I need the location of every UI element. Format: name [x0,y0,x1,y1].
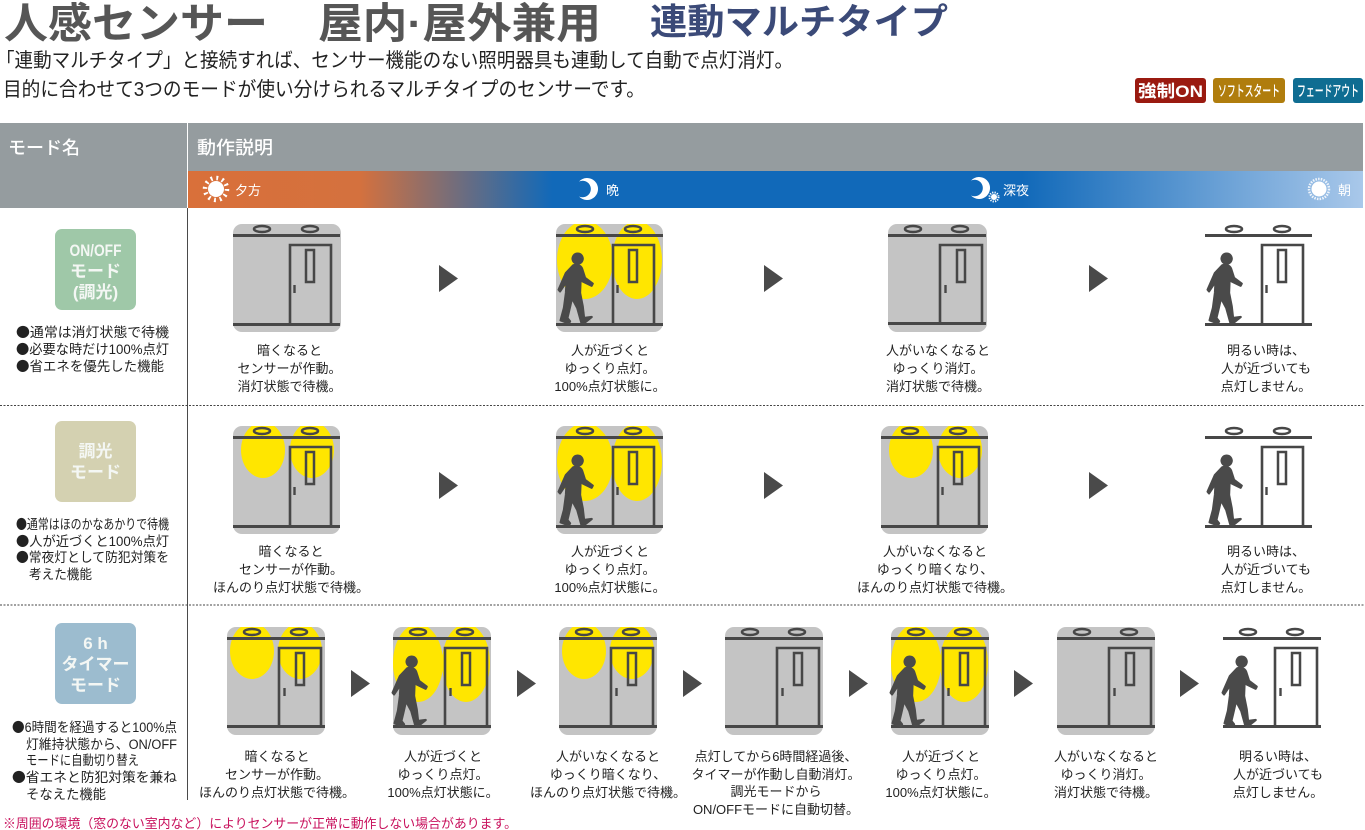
caption: 人が近づくと [571,544,649,559]
mode notes: timer [12,716,178,802]
scene: standby dark [233,224,341,332]
caption: ゆっくり点灯。 [397,767,489,782]
badge: soft start: ソフトスタート [1218,83,1280,100]
mode notes: timer: ●6時間を経過すると100%点 [12,716,177,736]
arrow [849,670,868,697]
mode badge: on/off: モード [70,262,121,281]
arrow [683,670,702,697]
caption [1221,343,1311,394]
heading: mode name: モード名 [8,138,80,158]
panel: dimming mode [16,421,1312,595]
arrow [1180,670,1199,697]
mode notes: on/off: ●必要な時だけ100%点灯 [16,338,169,358]
badge: soft start [1213,78,1285,103]
label: night: 晩 [606,183,619,198]
title: 屋内·屋外兼用 [318,0,601,47]
title [4,0,948,47]
caption [530,749,686,800]
mode badge: timer: タイマー [62,655,130,674]
arrow [1014,670,1033,697]
mode badge: timer [55,623,136,704]
table header [0,123,1363,208]
scene 1: dim standby [227,623,325,735]
badge: forced on [1135,78,1206,103]
mode notes: timer: ●省エネと防犯対策を兼ね [12,766,178,786]
mode badge: dimming: モード [70,463,121,482]
arrow [439,472,458,499]
caption: タイマーが作動し自動消灯。 [691,767,861,782]
caption: 点灯しません。 [1221,379,1311,394]
caption: ゆっくり消灯。 [892,361,984,376]
caption [554,544,666,595]
caption: 消灯状態で待機。 [886,379,990,394]
mode notes: dimming: 考えた機能 [29,567,92,582]
caption: ON/OFFモードに自動切替。 [693,802,859,817]
mode notes: dimming [16,513,169,582]
caption: 100%点灯状態に。 [387,785,499,800]
scene 6: dark [1057,627,1155,735]
caption [885,749,997,800]
arrow [439,265,458,292]
caption: 人が近づくと [404,749,482,764]
caption: 人がいなくなると [556,749,660,764]
scene: dim standby [233,422,340,534]
scene 5: person lit [891,624,989,735]
caption: ほんのり点灯状態で待機。 [199,785,355,800]
mode notes: dimming: ●人が近づくと100%点灯 [16,530,169,550]
caption: ゆっくり消灯。 [1060,767,1152,782]
scene: daylight [1205,428,1312,526]
intro text: 「連動マルチタイプ」と接続すれば、センサー機能のない照明器具も連動して自動で点灯消灯。 [0,49,793,72]
scene: person lit [556,423,663,534]
caption: ゆっくり暗くなり、 [550,767,666,782]
caption: 点灯してから6時間経過後、 [695,749,857,764]
mode notes: on/off: ●省エネを優先した機能 [16,355,164,375]
caption [1233,749,1323,800]
scene: daylight [1205,226,1312,324]
caption: 100%点灯状態に。 [554,379,666,394]
mode badge: timer: 6 h [83,634,108,653]
arrow [517,670,536,697]
arrow [764,472,783,499]
intro text [0,49,793,101]
caption: 明るい時は、 [1227,343,1305,358]
caption: 点灯しません。 [1233,785,1323,800]
time gradient bar [188,171,1363,208]
mode notes: timer: モードに自動切り替え [26,753,139,768]
icon: moon [579,178,598,200]
caption [691,749,861,817]
arrow [764,265,783,292]
caption: 人がいなくなると [886,343,990,358]
caption: ほんのり点灯状態で待機。 [213,580,369,595]
caption: 100%点灯状態に。 [554,580,666,595]
caption: ゆっくり点灯。 [564,562,656,577]
caption: 人が近づくと [571,343,649,358]
caption: 人が近づくと [902,749,980,764]
caption: ゆっくり点灯。 [895,767,987,782]
icon: evening sun [205,178,227,200]
caption: 消灯状態で待機。 [237,379,342,394]
mode notes: on/off [16,321,170,375]
intro text: 目的に合わせて3つのモードが使い分けられるマルチタイプのセンサーです。 [3,78,645,101]
caption: 消灯状態で待機。 [1054,785,1158,800]
icon: moon and star [971,177,998,202]
caption [1054,749,1158,800]
caption [237,343,342,394]
scene 4: timer off [725,627,823,735]
caption: センサーが作動。 [239,562,343,577]
arrow [1089,265,1108,292]
mode badge: dimming: 調光 [78,442,112,461]
caption: 100%点灯状態に。 [885,785,997,800]
caption [213,544,369,595]
mode notes: dimming: ●常夜灯として防犯対策を [16,546,169,566]
caption: ほんのり点灯状態で待機。 [530,785,686,800]
badge: forced on: 強制ON [1138,82,1203,101]
caption: 暗くなると [244,749,310,764]
caption: センサーが作動。 [225,767,329,782]
scene 2: person lit [393,624,491,735]
caption: ほんのり点灯状態で待機。 [857,580,1013,595]
scene: back to dark [888,224,987,332]
mode badge: timer: モード [70,676,121,695]
title: 人感センサー [4,0,268,47]
heading: description: 動作説明 [197,138,273,158]
caption [886,343,990,394]
icon: morning sun [1309,179,1329,199]
mode badge: dimming [55,421,136,502]
caption: 人がいなくなると [883,544,987,559]
caption: 人が近づいても [1221,562,1311,577]
title: 連動マルチタイプ [650,1,948,42]
scene: back to dim [881,422,988,534]
mode notes: timer: 灯維持状態から、ON/OFF [26,737,177,752]
mode badge: on/off: (調光) [73,283,118,302]
caption: 明るい時は、 [1227,544,1305,559]
caption [554,343,666,394]
arrow [351,670,370,697]
mode notes: timer: そなえた機能 [26,787,106,802]
label: morning: 朝 [1338,183,1351,198]
arrow [1089,472,1108,499]
caption: 調光モードから [730,784,822,799]
panel: on/off mode [16,221,1312,394]
mode badge: on/off [55,229,136,310]
function badges [1135,78,1363,103]
mode notes: dimming: ●通常はほのかなあかりで待機 [16,513,169,533]
caption: 暗くなると [258,544,324,559]
scene: person lit [556,221,663,332]
scene 3: back to dim [559,623,657,735]
mode notes: on/off: ●通常は消灯状態で待機 [16,321,170,341]
caption: 人が近づいても [1221,361,1311,376]
caption: センサーが作動。 [237,361,342,376]
label: late night: 深夜 [1003,183,1029,198]
caption: ゆっくり暗くなり、 [877,562,993,577]
caption [387,749,499,800]
caption: 明るい時は、 [1239,749,1317,764]
caption [199,749,355,800]
mode badge: on/off: ON/OFF [70,241,122,260]
caption: ゆっくり点灯。 [564,361,656,376]
label: evening: 夕方 [235,183,261,198]
caption [857,544,1013,595]
badge: fade out [1293,78,1363,103]
caption: 暗くなると [257,343,322,358]
caption [1221,544,1311,595]
caption: 人がいなくなると [1054,749,1158,764]
scene 7: daylight [1223,629,1321,726]
caption: 人が近づいても [1233,767,1323,782]
panel: 6h timer mode [12,623,1323,817]
caption: 点灯しません。 [1221,580,1311,595]
